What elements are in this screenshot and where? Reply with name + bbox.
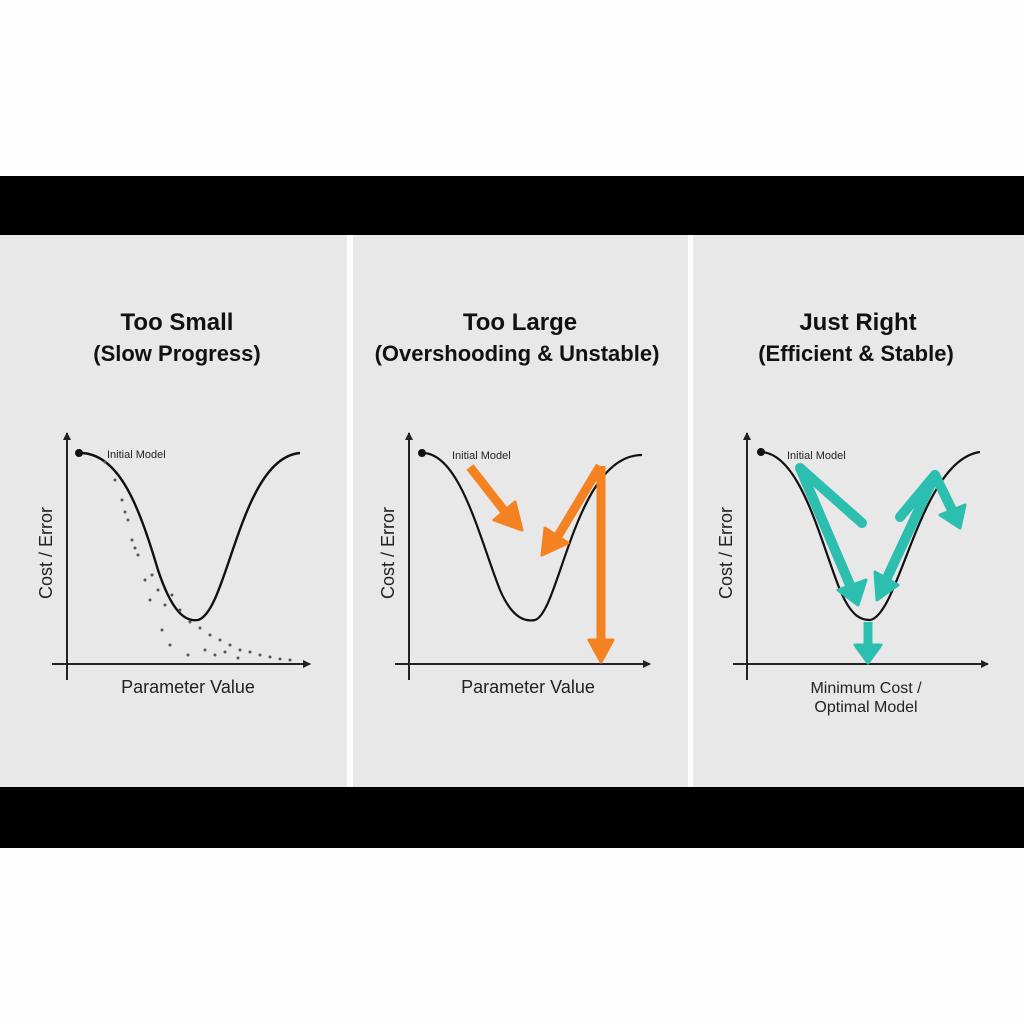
bottom black band xyxy=(0,787,1024,848)
chart: overshooting xyxy=(378,433,650,697)
panel: just right xyxy=(693,235,1024,787)
heading: just right xyxy=(758,309,954,366)
heading: just right: Just Right xyxy=(799,309,917,336)
panel: too large xyxy=(353,235,688,787)
panel: too small xyxy=(0,235,347,787)
chart: efficient: Initial Model xyxy=(787,450,846,462)
label: initial model: Initial Model xyxy=(107,449,166,461)
heading: too small: (Slow Progress) xyxy=(93,341,261,366)
arrows: teal steps xyxy=(800,468,965,663)
chart: overshooting: Cost / Error xyxy=(378,507,398,599)
heading: too large xyxy=(375,309,659,366)
axis label: minimum cost: Optimal Model xyxy=(814,699,918,716)
heading: too large: (Overshooding & Unstable) xyxy=(375,341,659,366)
chart: efficient: Cost / Error xyxy=(716,507,736,599)
top black band xyxy=(0,176,1024,235)
axis label: parameter value: Parameter Value xyxy=(121,677,255,697)
heading: just right: (Efficient & Stable) xyxy=(758,341,954,366)
arrows: orange overshoot xyxy=(470,466,613,662)
chart: slow progress xyxy=(36,433,310,697)
heading: too small: Too Small xyxy=(121,309,233,336)
chart: overshooting: Initial Model xyxy=(452,450,511,462)
heading: too small xyxy=(93,309,261,366)
heading: too large: Too Large xyxy=(463,309,577,336)
chart: efficient xyxy=(716,433,988,716)
axis label: minimum cost: Minimum Cost / xyxy=(810,680,922,697)
axis label: minimum cost xyxy=(810,680,922,716)
chart: overshooting: Parameter Value xyxy=(461,677,595,697)
axis label: cost / error: Cost / Error xyxy=(36,507,56,599)
